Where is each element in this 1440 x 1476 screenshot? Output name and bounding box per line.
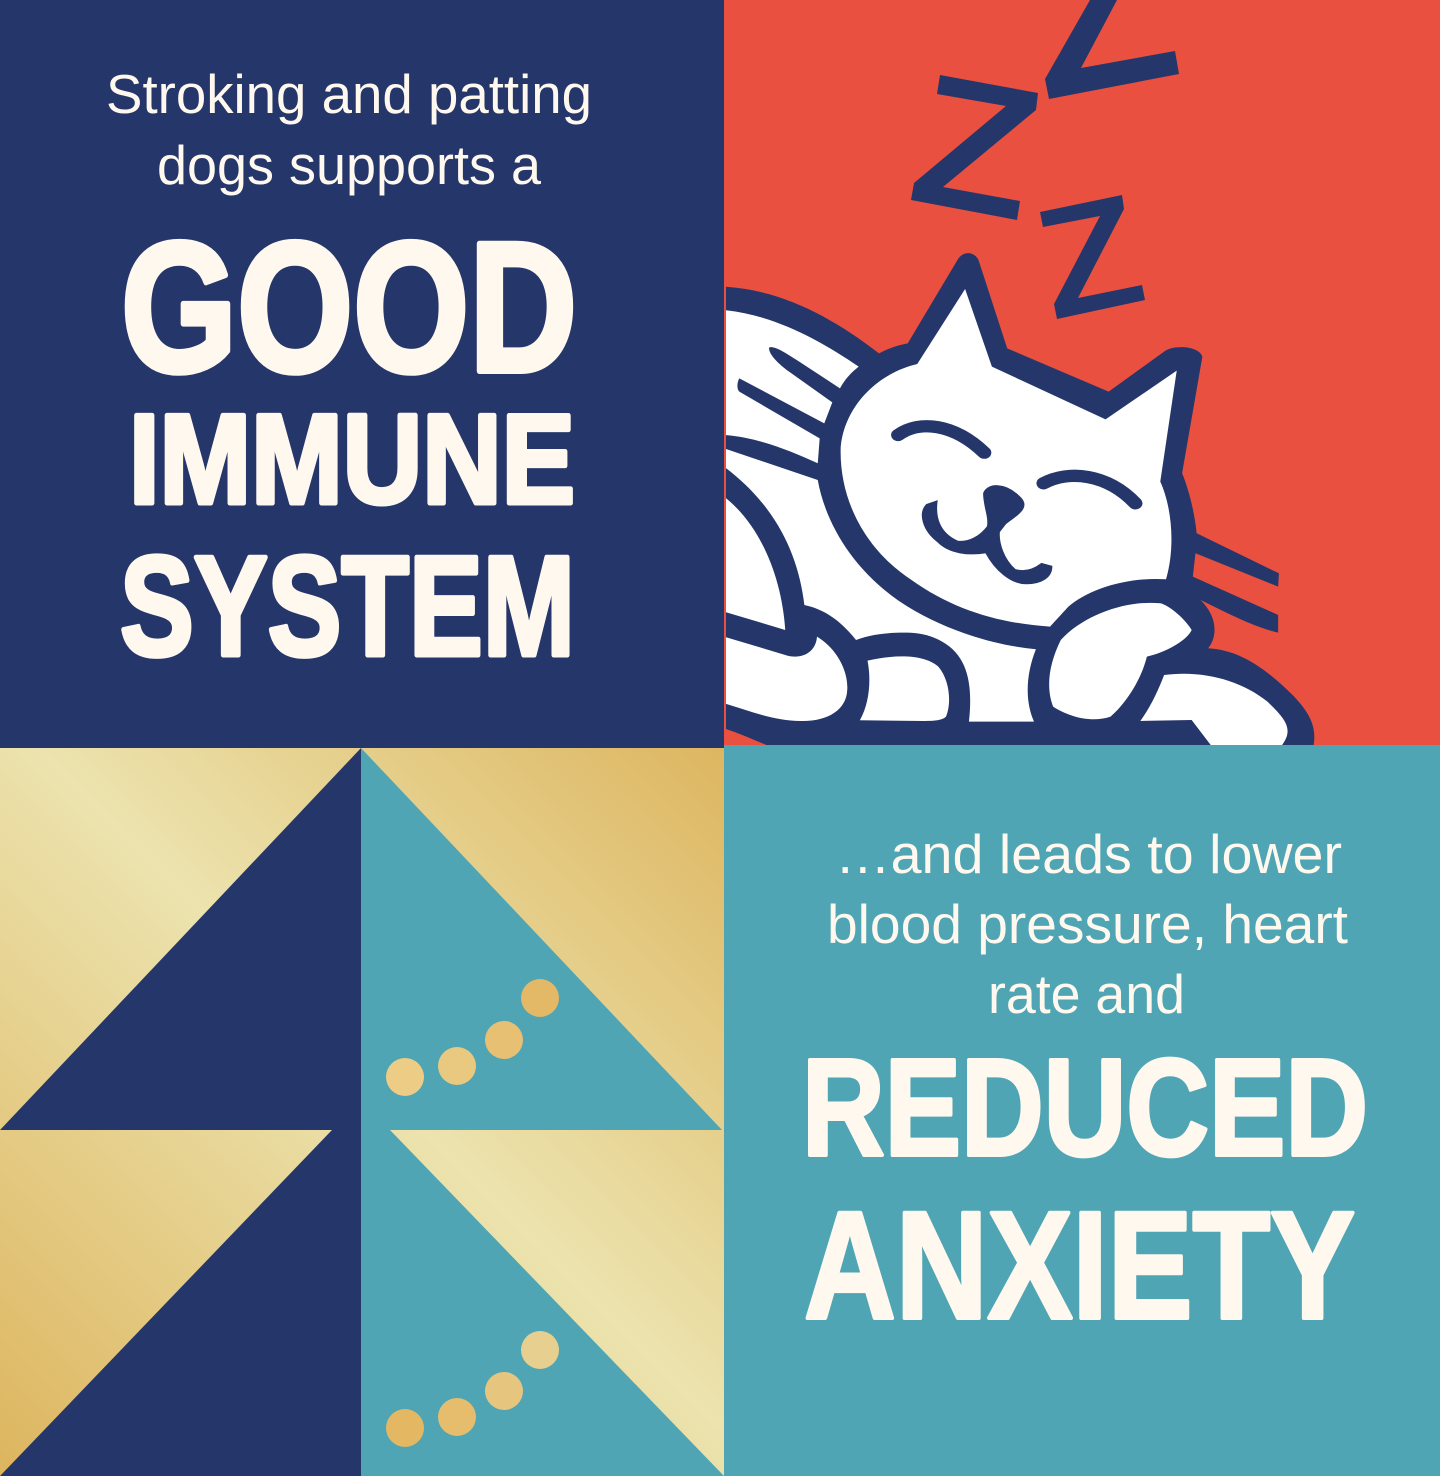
intro text: lower blood pressure (827, 823, 1348, 1025)
panel: geometric pattern (0, 748, 724, 1476)
panel: sleeping cat (724, 0, 1440, 747)
intro text: stroking and patting: Stroking and patting (106, 63, 592, 125)
teal arrow shape (361, 748, 724, 1476)
panel: good immune system (0, 0, 724, 748)
icon: closed eyes (898, 426, 1135, 503)
heading: good immune system: GOOD (121, 205, 577, 411)
dots: lower row (386, 1331, 559, 1447)
icon: cat illustration (724, 253, 1314, 747)
icon: sleeping z letters (911, 0, 1179, 319)
dots: upper row (386, 979, 559, 1096)
intro text: stroking and patting: dogs supports a (157, 134, 541, 196)
heading: good immune system: SYSTEM (120, 527, 575, 686)
heading: good immune system: IMMUNE (129, 388, 575, 530)
icon: nose and mouth (923, 486, 1051, 583)
heading: good immune system (120, 205, 577, 686)
heading: reduced anxiety (802, 1031, 1368, 1351)
intro text: lower blood pressure: rate and (988, 963, 1185, 1025)
navy arrow shape (0, 748, 361, 1476)
intro text: lower blood pressure: …and leads to lower (835, 823, 1342, 885)
intro text: stroking and patting (106, 63, 592, 196)
intro text: lower blood pressure: blood pressure, heart (827, 893, 1348, 955)
panel: reduced anxiety (724, 745, 1440, 1476)
